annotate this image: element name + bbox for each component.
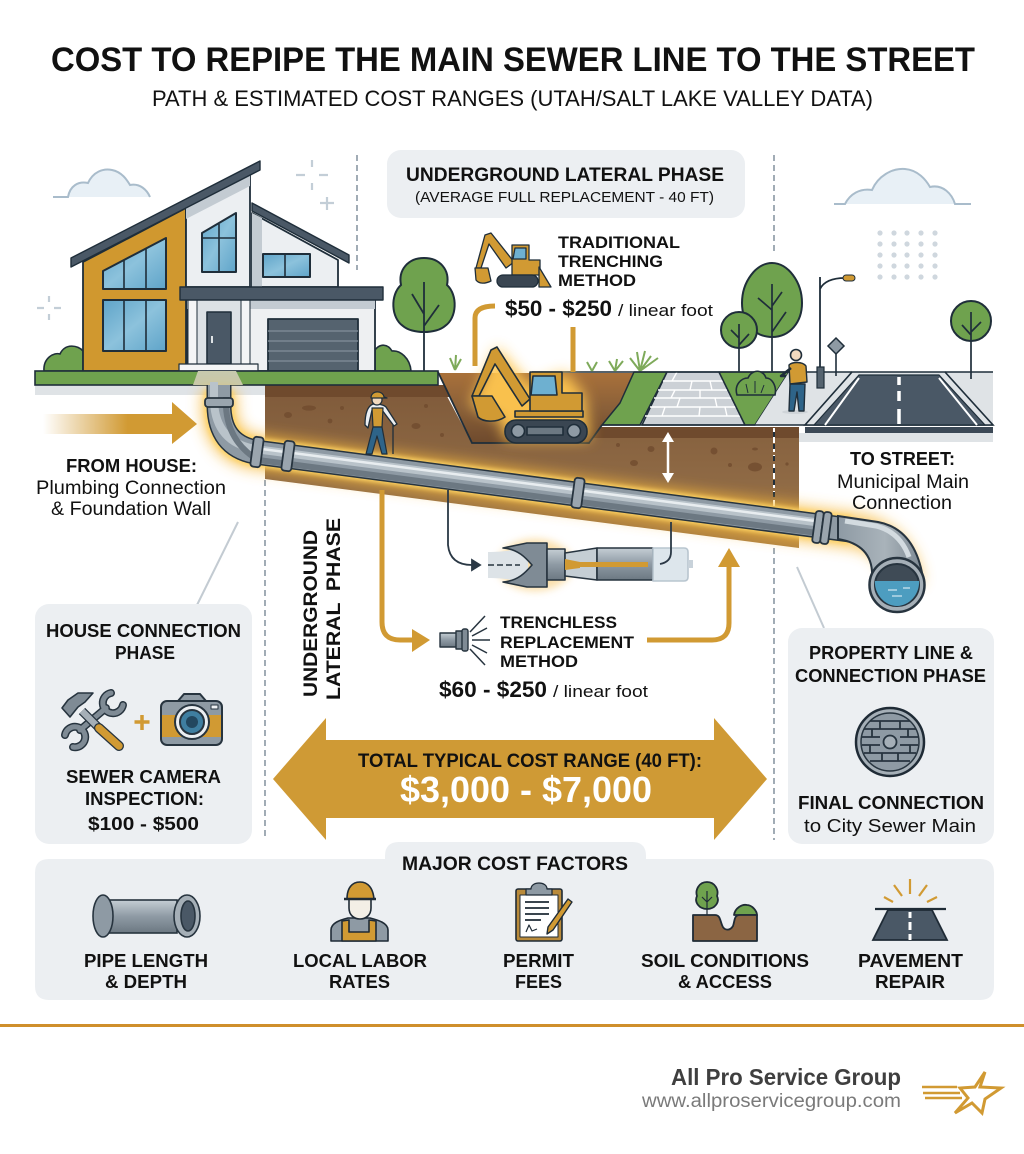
icon: big excavator <box>472 347 587 443</box>
text: vertical underground lateral phase: UNDERGROUND <box>301 530 322 697</box>
illustration: pipe elbow <box>838 516 923 578</box>
text: traditional trenching method: METHOD <box>558 271 636 290</box>
panel: property line and connection phase <box>788 628 994 844</box>
footer brand text: www.allproservicegroup.com <box>641 1091 901 1112</box>
dot grid <box>877 230 938 280</box>
connector line right <box>797 567 824 628</box>
labels: cost factors: PIPE LENGTH <box>84 951 208 971</box>
labels: cost factors: LOCAL LABOR <box>293 951 427 971</box>
illustration: soil cross-section <box>265 385 799 548</box>
labels: cost factors: & ACCESS <box>678 972 772 992</box>
panel: house connection phase: INSPECTION: <box>85 789 204 809</box>
text: to street: Municipal Main <box>837 472 969 493</box>
footer brand text <box>641 1064 901 1112</box>
illustration: worker on pipe <box>365 392 397 454</box>
text: to street: TO STREET: <box>850 449 955 469</box>
heading: major cost factors: MAJOR COST FACTORS <box>402 854 628 875</box>
illustration: pipe opening <box>870 558 924 612</box>
arrow: dark pointer from pipe <box>660 522 671 564</box>
panel: property line and connection phase: FINAL CONNECTION <box>798 793 984 813</box>
arrow: dark pointer into tool <box>448 490 480 570</box>
illustration: road <box>774 372 993 506</box>
illustration: house <box>44 161 411 371</box>
panel: underground lateral phase header: UNDERGROUND LATERAL PHASE <box>406 165 724 186</box>
illustration: main sewer pipe <box>214 382 905 585</box>
panel: underground lateral phase header <box>387 150 745 218</box>
panel: house connection phase <box>35 604 252 844</box>
text: trenchless replacement method: $60 - $250 <box>439 677 547 702</box>
text: traditional trenching method: / linear foot <box>618 301 713 320</box>
phase divider dashes <box>265 155 774 840</box>
subtitle: PATH & ESTIMATED COST RANGES (UTAH/SALT LAKE VALLEY DATA) <box>152 86 873 111</box>
text: vertical underground lateral phase: LATERAL PHASE <box>324 518 345 700</box>
connector line left <box>197 522 238 605</box>
text: trenchless replacement method: TRENCHLESS <box>500 613 617 632</box>
cloud left <box>53 170 150 197</box>
text: to street: Connection <box>852 493 952 514</box>
arrow: trenching connector <box>475 306 573 372</box>
panel: house connection phase: SEWER CAMERA <box>66 767 221 787</box>
illustration: street scene trees, lamp and sign <box>721 263 991 395</box>
icon: plus sign <box>134 715 150 730</box>
labels: cost factors: & DEPTH <box>105 972 187 992</box>
arrow: trenchless path out <box>647 548 740 640</box>
text: traditional trenching method <box>505 233 713 321</box>
icon: big excavator glow <box>470 347 590 440</box>
icon: trenchless nozzle <box>440 616 490 665</box>
footer brand text: All Pro Service Group <box>671 1064 901 1090</box>
panel: underground lateral phase header: (AVERAGE FULL REPLACEMENT - 40 FT) <box>415 189 714 206</box>
labels: cost factors: PAVEMENT <box>858 951 963 971</box>
icon: bursting head tool <box>488 539 693 591</box>
total cost double arrow: $3,000 - $7,000 <box>400 769 652 810</box>
panel: property line and connection phase: CONNECTION PHASE <box>795 666 986 686</box>
panel: property line and connection phase: to City Sewer Main <box>804 816 976 836</box>
text: from house <box>36 456 226 520</box>
cloud right <box>834 169 971 204</box>
text: vertical underground lateral phase <box>301 518 345 700</box>
text: traditional trenching method: $50 - $250 <box>505 296 612 321</box>
icon: soil and tree <box>693 882 757 941</box>
icon: permit clipboard <box>516 883 572 941</box>
icon: manhole cover <box>856 708 924 776</box>
total cost double arrow <box>273 718 767 840</box>
icon: camera <box>161 694 222 745</box>
panel: house connection phase: $100 - $500 <box>88 814 199 834</box>
panel: house connection phase: HOUSE CONNECTION <box>46 621 241 641</box>
text: trenchless replacement method <box>439 613 648 702</box>
text: trenchless replacement method: / linear foot <box>553 682 648 701</box>
panel: property line and connection phase: PROPERTY LINE & <box>809 643 973 663</box>
illustration: grass tufts <box>450 351 658 371</box>
text: trenchless replacement method: REPLACEMENT <box>500 633 635 652</box>
labels: cost factors: PERMIT <box>503 951 574 971</box>
text: from house: FROM HOUSE: <box>66 456 197 476</box>
illustration: tree beside house <box>393 258 455 371</box>
panel: house connection phase: PHASE <box>115 643 175 663</box>
icon: hard hat worker <box>331 882 388 941</box>
icon: pavement repair <box>873 879 947 940</box>
icon: brand star <box>922 1072 1001 1113</box>
title: COST TO REPIPE THE MAIN SEWER LINE TO THE STREET <box>51 41 975 79</box>
arrow: from house <box>43 402 197 444</box>
labels: cost factors: REPAIR <box>875 972 945 992</box>
labels: cost factors: FEES <box>515 972 562 992</box>
total cost double arrow: TOTAL TYPICAL COST RANGE (40 FT): <box>358 751 702 772</box>
text: traditional trenching method: TRENCHING <box>558 252 663 271</box>
illustration: trench <box>438 372 634 443</box>
labels: cost factors <box>84 951 963 992</box>
illustration: person beside road <box>781 350 808 414</box>
text: trenchless replacement method: METHOD <box>500 652 578 671</box>
panel: major cost factors <box>35 842 994 1000</box>
footer rule <box>0 1024 1024 1027</box>
icon: white depth arrow <box>662 432 674 483</box>
labels: cost factors: RATES <box>329 972 390 992</box>
text: from house: & Foundation Wall <box>51 499 211 520</box>
icon: hammer and wrench <box>62 693 123 747</box>
illustration: pipe couplings <box>205 398 832 544</box>
icon: small excavator <box>475 233 551 287</box>
icon: pipe <box>93 895 200 937</box>
labels: cost factors: SOIL CONDITIONS <box>641 951 809 971</box>
text: from house: Plumbing Connection <box>36 478 226 499</box>
illustration: lawn and grey ground strip <box>35 371 438 395</box>
sparkle marks <box>37 160 334 320</box>
text: traditional trenching method: TRADITIONAL <box>558 233 680 252</box>
illustration: walkway, lawn strips, pavers <box>602 372 993 425</box>
text: to street <box>837 449 969 514</box>
arrow: trenchless path in <box>382 490 430 652</box>
